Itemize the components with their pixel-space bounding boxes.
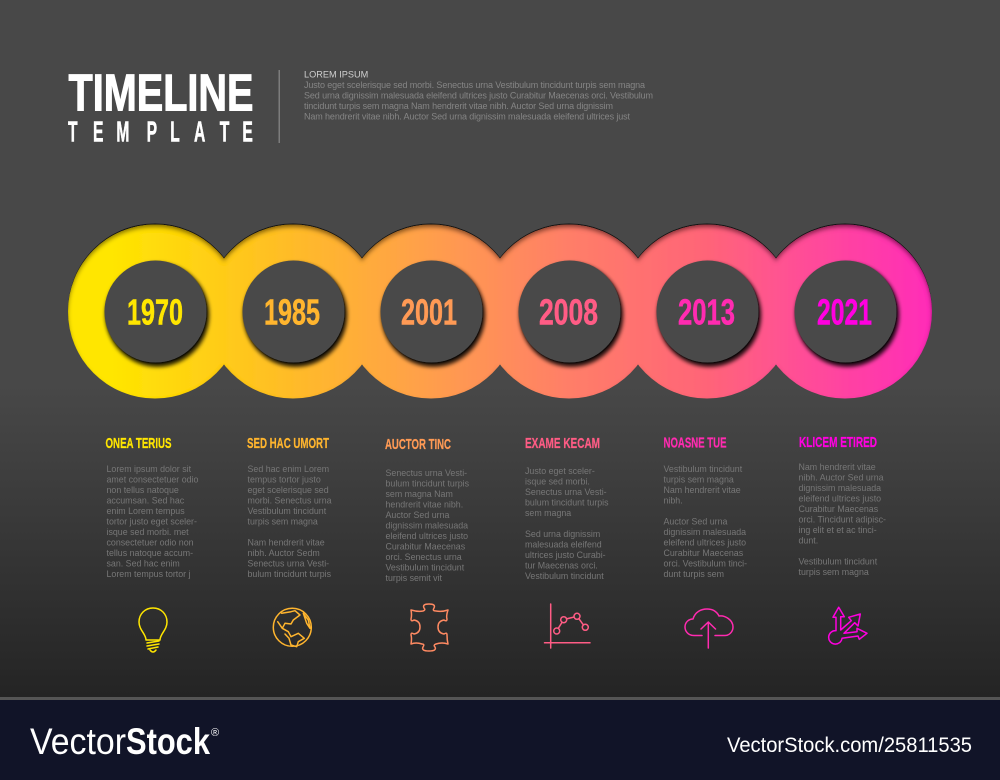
column 3 text: Auctor Sed urna xyxy=(386,510,449,520)
column 6 text: dunt. xyxy=(798,536,818,546)
year marker 1985: 1985 xyxy=(264,292,320,332)
year marker 2013: 2013 xyxy=(678,292,735,332)
column 5 text: Curabitur Maecenas xyxy=(664,548,744,558)
intro text block: tincidunt turpis sem magna Nam hendrerit vitae nibh. Auctor Sed urna dignissim xyxy=(304,101,613,111)
column 3 text: turpis semit vit xyxy=(386,573,443,583)
column 2 text: tempus tortor justo xyxy=(248,474,321,484)
intro text block: Justo eget scelerisque sed morbi. Senectus urna Vestibulum tincidunt turpis sem magna xyxy=(304,80,645,90)
intro text block: Nam hendrerit vitae nibh. Auctor Sed urna dignissim malesuada eleifend ultrices just xyxy=(304,112,630,122)
column 6 heading: KLICEM ETIRED xyxy=(799,434,877,451)
column 1 text: tortor justo eget sceler- xyxy=(106,516,197,526)
icon: line chart xyxy=(544,604,590,648)
year marker 2001 xyxy=(380,260,482,362)
year marker 2001: 2001 xyxy=(401,292,457,332)
column 2 text: Vestibulum tincidunt xyxy=(248,506,327,516)
footer logo: ® xyxy=(211,727,219,739)
column 3 text: bulum tincidunt turpis xyxy=(386,478,470,488)
column 4 text: Senectus urna Vesti- xyxy=(525,487,607,497)
column 4 text: bulum tincidunt turpis xyxy=(525,498,609,508)
column 3 text: Vestibulum tincidunt xyxy=(386,562,465,572)
column 6 text: turpis sem magna xyxy=(798,567,869,577)
column 4 text: isque sed morbi. xyxy=(525,476,590,486)
column 2 text: morbi. Senectus urna xyxy=(248,496,332,506)
column 4 heading: EXAME KECAM xyxy=(525,435,600,452)
column 1 text: amet consectetuer odio xyxy=(106,474,199,484)
icon: diverging arrows xyxy=(829,607,867,644)
column 4 text: Sed urna dignissim xyxy=(525,529,600,539)
column 3 text: sem magna Nam xyxy=(386,489,453,499)
column 5 text: dunt turpis sem xyxy=(664,569,724,579)
year marker 2008: 2008 xyxy=(539,292,598,332)
column 4 text: tur Maecenas orci. xyxy=(525,560,598,570)
column 3 text: dignissim malesuada xyxy=(386,520,468,530)
column 1 text: non tellus natoque xyxy=(106,485,179,495)
footer image id: VectorStock.com/25811535 xyxy=(727,734,972,757)
column 5 text: dignissim malesuada xyxy=(664,527,746,537)
column 1 text: enim Lorem tempus xyxy=(106,506,185,516)
column 2 text: nibh. Auctor Sedm xyxy=(248,548,320,558)
column 2 text: Senectus urna Vesti- xyxy=(248,558,329,568)
column 3 text: Senectus urna Vesti- xyxy=(386,468,467,478)
column 6 text: Nam hendrerit vitae xyxy=(798,462,876,472)
icon: cloud upload xyxy=(685,609,733,648)
column 1 text: accumsan. Sed hac xyxy=(106,496,185,506)
column 4 text: malesuada eleifend xyxy=(525,540,602,550)
column 6 text: ing elit et et ac tinci- xyxy=(798,525,877,535)
column 2 text: turpis sem magna xyxy=(248,516,318,526)
column 5 text: Nam hendrerit vitae xyxy=(664,485,741,495)
footer logo: Stock xyxy=(126,721,210,762)
column 5 text: turpis sem magna xyxy=(664,474,734,484)
column 3 text: hendrerit vitae nibh. xyxy=(386,500,463,510)
intro text block: Sed urna dignissim malesuada eleifend ultrices justo Curabitur Maecenas orci. Vestibulum xyxy=(304,90,653,100)
year marker 2013 xyxy=(656,260,758,362)
column 4 text: Vestibulum tincidunt xyxy=(525,571,604,581)
column 5 text xyxy=(664,464,747,579)
column 3 text: Curabitur Maecenas xyxy=(386,542,466,552)
title xyxy=(68,64,254,148)
column 2 text: Nam hendrerit vitae xyxy=(248,538,325,548)
column 1 text: tellus natoque accum- xyxy=(106,548,193,558)
year marker 1985 xyxy=(242,260,344,362)
column 2 heading: SED HAC UMORT xyxy=(247,435,329,452)
intro text block xyxy=(304,70,653,122)
year marker 2008 xyxy=(518,260,620,362)
column 5 text: Vestibulum tincidunt xyxy=(664,464,743,474)
column 1 text: consectetuer odio non xyxy=(106,538,194,548)
column 1 text: san. Sed hac enim xyxy=(106,558,180,568)
column 6 text: dignissim malesuada xyxy=(798,483,881,493)
column 3 text: eleifend ultrices justo xyxy=(386,531,468,541)
title: TEMPLATE xyxy=(68,115,253,148)
column 1 text: Lorem ipsum dolor sit xyxy=(106,464,192,474)
year marker 2021 xyxy=(794,260,896,362)
column 2 text xyxy=(248,464,332,579)
icon: globe xyxy=(273,608,311,647)
column 5 text: eleifend ultrices justo xyxy=(664,538,746,548)
intro text block: LOREM IPSUM xyxy=(304,70,368,80)
column 1 text: Lorem tempus tortor j xyxy=(106,569,191,579)
column 4 text xyxy=(525,466,609,581)
column 3 heading: AUCTOR TINC xyxy=(385,436,451,453)
header divider xyxy=(278,70,280,143)
column 6 text: Vestibulum tincidunt xyxy=(798,556,878,566)
column 5 heading: NOASNE TUE xyxy=(664,434,726,452)
column 3 text xyxy=(386,468,470,583)
column 1 text: isque sed morbi. met xyxy=(106,527,189,537)
column 2 text: Sed hac enim Lorem xyxy=(248,464,329,474)
column 3 text: orci. Senectus urna xyxy=(386,552,462,562)
year marker 2021: 2021 xyxy=(817,292,872,332)
column 4 text: sem magna xyxy=(525,508,571,518)
column 4 text: ultrices justo Curabi- xyxy=(525,550,606,560)
column 5 text: orci. Vestibulum tinci- xyxy=(664,558,747,568)
column 6 text: Curabitur Maecenas xyxy=(798,504,879,514)
column 5 text: Auctor Sed urna xyxy=(664,516,727,526)
gradient ring chain xyxy=(68,224,932,398)
column 1 heading: ONEA TERIUS xyxy=(106,435,172,452)
footer logo xyxy=(30,721,219,762)
column 6 text: nibh. Auctor Sed urna xyxy=(798,472,884,482)
column 6 text xyxy=(798,462,886,577)
year marker 1970 xyxy=(104,260,206,362)
icon: lightbulb xyxy=(139,608,167,652)
column 6 text: orci. Tincidunt adipisc- xyxy=(798,514,886,524)
icon: puzzle piece xyxy=(411,604,448,651)
footer band xyxy=(0,697,1000,780)
footer logo: Vector xyxy=(30,721,126,762)
title: TIMELINE xyxy=(68,64,254,122)
column 4 text: Justo eget sceler- xyxy=(525,466,595,476)
year marker 1970: 1970 xyxy=(127,292,183,332)
column 5 text: nibh. xyxy=(664,496,683,506)
ring top edge shadow xyxy=(68,224,932,398)
column 1 text xyxy=(106,464,199,579)
column 2 text: eget scelerisque sed xyxy=(248,485,329,495)
column 2 text: bulum tincidunt turpis xyxy=(248,569,332,579)
column 6 text: eleifend ultrices justo xyxy=(798,494,881,504)
